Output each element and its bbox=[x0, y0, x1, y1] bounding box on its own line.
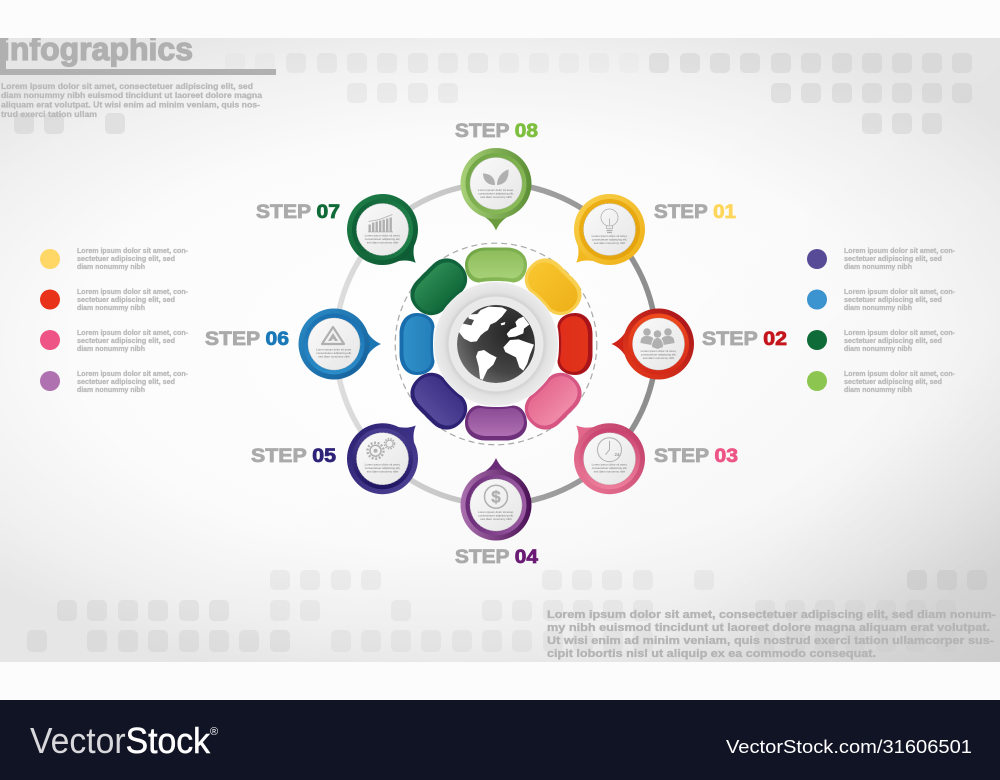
footer band bbox=[0, 700, 1000, 780]
label: step 05: STEP 05 bbox=[251, 446, 336, 467]
node: step 05 bbox=[347, 415, 426, 494]
icon: clock bbox=[598, 438, 622, 462]
legend item: light green: sectetuer adipiscing elit, sed bbox=[844, 379, 942, 386]
petal 07 bbox=[403, 251, 475, 323]
marker bbox=[394, 415, 426, 447]
legend item: pink bbox=[40, 330, 189, 353]
mini text: Lorem ipsum dolor sit amet, bbox=[316, 348, 352, 352]
mini text: consectetuer adipiscing elit, bbox=[365, 237, 400, 241]
legend item: yellow: Lorem ipsum dolor sit amet, con- bbox=[77, 248, 189, 255]
legend item: pink: sectetuer adipiscing elit, sed bbox=[77, 338, 175, 345]
legend item: blue: sectetuer adipiscing elit, sed bbox=[844, 297, 942, 304]
legend item: red: Lorem ipsum dolor sit amet, con- bbox=[77, 289, 189, 296]
intro paragraph: aliquam erat volutpat. Ut wisi enim ad minim veniam, quis nos- bbox=[1, 100, 260, 110]
legend item: red: diam nonummy nibh bbox=[77, 305, 145, 312]
mini text: Lorem ipsum dolor sit amet, bbox=[641, 349, 677, 353]
mini text: consectetuer adipiscing elit, bbox=[478, 192, 514, 196]
mini text: sed diam nonummy nibh bbox=[480, 195, 512, 199]
icon: recycle triangle bbox=[322, 327, 344, 344]
intro paragraph: diam nonummy nibh euismod tincidunt ut laoreet dolore magna bbox=[1, 91, 262, 100]
petals bbox=[400, 248, 592, 440]
marker bbox=[612, 329, 628, 359]
mini text: Lorem ipsum dolor sit amet, bbox=[592, 463, 628, 467]
label: step 01: STEP 01 bbox=[654, 202, 736, 223]
icon: dollar coin: $ bbox=[491, 488, 501, 507]
connecting ring bbox=[336, 184, 656, 504]
mini text: sed diam nonummy nibh bbox=[367, 240, 399, 244]
clock label: 24 bbox=[614, 452, 620, 457]
mini text bbox=[478, 510, 514, 521]
node: step 08 bbox=[460, 148, 532, 230]
dashed inner circle bbox=[395, 243, 597, 445]
mini text bbox=[316, 348, 352, 358]
petal 02 bbox=[558, 313, 592, 375]
intro paragraph bbox=[1, 82, 262, 119]
mini text: sed diam nonummy nibh bbox=[318, 354, 350, 358]
registered mark: ® bbox=[210, 726, 218, 738]
bottom paragraph: Lorem ipsum dolor sit amet, consectetuer adipiscing elit, sed diam nonum- bbox=[547, 609, 996, 621]
legend item: yellow bbox=[40, 248, 189, 271]
legend item: red: sectetuer adipiscing elit, sed bbox=[77, 297, 175, 304]
node: step 02 bbox=[612, 308, 694, 380]
bottom paragraph bbox=[547, 609, 996, 660]
right legend bbox=[807, 248, 956, 394]
mini text: Lorem ipsum dolor sit amet, bbox=[478, 188, 514, 192]
mini text bbox=[365, 463, 401, 474]
icon: globe bbox=[457, 305, 535, 383]
title: infographics bbox=[1, 31, 193, 67]
mini text bbox=[592, 463, 628, 474]
node: step 03 bbox=[566, 415, 645, 494]
mini text bbox=[641, 349, 677, 360]
bottom paragraph: Ut wisi enim ad minim veniam, quis nostrud exerci tation ullamcorper sus- bbox=[547, 635, 994, 647]
legend item: light green: diam nonummy nibh bbox=[844, 387, 912, 394]
legend item: dark green: sectetuer adipiscing elit, sed bbox=[844, 338, 942, 345]
legend item: indigo: sectetuer adipiscing elit, sed bbox=[844, 256, 942, 263]
mini text: sed diam nonummy nibh bbox=[594, 470, 626, 474]
node: step 04 bbox=[460, 458, 532, 540]
decorative rounded square pattern bbox=[14, 53, 987, 652]
legend item: yellow: sectetuer adipiscing elit, sed bbox=[77, 256, 175, 263]
mini text: consectetuer adipiscing elit, bbox=[592, 466, 627, 470]
mini text: sed diam nonummy nibh bbox=[480, 517, 512, 521]
legend item: blue: Lorem ipsum dolor sit amet, con- bbox=[844, 289, 956, 296]
bottom paragraph: my nibh euismod tincidunt ut laoreet dolore magna aliquam erat volutpat. bbox=[547, 622, 990, 634]
petal 01 bbox=[517, 251, 589, 323]
petal 03 bbox=[517, 365, 589, 437]
mini text: Lorem ipsum dolor sit amet, bbox=[478, 510, 514, 514]
legend item: dark green: Lorem ipsum dolor sit amet, con- bbox=[844, 330, 956, 337]
mini text: consectetuer adipiscing elit, bbox=[478, 514, 514, 518]
intro paragraph: Lorem ipsum dolor sit amet, consectetuer adipiscing elit, sed bbox=[1, 82, 253, 91]
petal 05 bbox=[403, 365, 475, 437]
legend item: dark green bbox=[807, 330, 956, 353]
marker bbox=[566, 241, 598, 273]
legend item: purple: sectetuer adipiscing elit, sed bbox=[77, 379, 175, 386]
legend item: indigo: diam nonummy nibh bbox=[844, 264, 912, 271]
mini text: sed diam nonummy nibh bbox=[367, 470, 399, 474]
mini text bbox=[478, 188, 514, 199]
legend item: yellow: diam nonummy nibh bbox=[77, 264, 145, 271]
mini text bbox=[592, 234, 628, 245]
mini text: sed diam nonummy nibh bbox=[643, 356, 675, 360]
icon: gears bbox=[368, 439, 394, 459]
label: step 02: STEP 02 bbox=[702, 329, 787, 350]
mini text: consectetuer adipiscing elit, bbox=[641, 352, 676, 356]
legend item: indigo bbox=[807, 248, 956, 271]
label: step 06: STEP 06 bbox=[205, 329, 289, 350]
label: step 04: STEP 04 bbox=[455, 547, 538, 568]
mini text: Lorem ipsum dolor sit amet, bbox=[365, 463, 401, 467]
legend item: red bbox=[40, 289, 189, 312]
background panel bbox=[0, 38, 1000, 662]
mini text: consectetuer adipiscing elit, bbox=[592, 238, 627, 242]
footer logo: VectorStock bbox=[30, 720, 211, 761]
legend item: blue: diam nonummy nibh bbox=[844, 305, 912, 312]
label: step 08: STEP 08 bbox=[455, 121, 538, 142]
marker bbox=[394, 241, 426, 273]
title block bbox=[0, 38, 276, 75]
legend item: blue bbox=[807, 289, 956, 312]
legend item: pink: Lorem ipsum dolor sit amet, con- bbox=[77, 330, 189, 337]
petal 08 bbox=[465, 248, 527, 282]
marker bbox=[365, 329, 381, 359]
left legend bbox=[40, 248, 189, 394]
mini text: consectetuer adipiscing elit, bbox=[316, 351, 352, 355]
petal 06 bbox=[400, 313, 434, 375]
legend item: dark green: diam nonummy nibh bbox=[844, 346, 912, 353]
bottom paragraph: cipit lobortis nisl ut aliquip ex ea commodo consequat. bbox=[547, 648, 876, 660]
legend item: light green bbox=[807, 371, 956, 394]
mini text: consectetuer adipiscing elit, bbox=[365, 466, 400, 470]
node: step 01 bbox=[566, 194, 645, 273]
intro paragraph: trud exerci tation ullam bbox=[1, 110, 97, 119]
marker bbox=[481, 214, 511, 230]
marker bbox=[566, 415, 598, 447]
title bar bbox=[0, 38, 276, 75]
marker bbox=[481, 458, 511, 474]
icon: light bulb bbox=[601, 209, 618, 232]
mini text: Lorem ipsum dolor sit amet, bbox=[592, 234, 628, 238]
icon: bar chart bbox=[368, 214, 393, 232]
footer id: VectorStock.com/31606501 bbox=[726, 736, 972, 757]
legend item: purple: diam nonummy nibh bbox=[77, 387, 145, 394]
mini text: Lorem ipsum dolor sit amet, bbox=[365, 234, 401, 238]
node: step 07 bbox=[347, 194, 426, 273]
icon: leaves bbox=[483, 170, 509, 185]
legend item: purple: Lorem ipsum dolor sit amet, con- bbox=[77, 371, 189, 378]
mini text bbox=[365, 234, 401, 244]
label: step 03: STEP 03 bbox=[654, 446, 738, 467]
legend item: light green: Lorem ipsum dolor sit amet, con- bbox=[844, 371, 956, 378]
icon: people bbox=[640, 328, 674, 349]
central hub bbox=[434, 282, 558, 406]
node: step 06 bbox=[298, 308, 381, 380]
label: step 07: STEP 07 bbox=[256, 202, 340, 223]
legend item: purple bbox=[40, 371, 189, 394]
legend item: pink: diam nonummy nibh bbox=[77, 346, 145, 353]
legend item: indigo: Lorem ipsum dolor sit amet, con- bbox=[844, 248, 956, 255]
mini text: sed diam nonummy nibh bbox=[594, 241, 626, 245]
petal 04 bbox=[465, 406, 527, 440]
